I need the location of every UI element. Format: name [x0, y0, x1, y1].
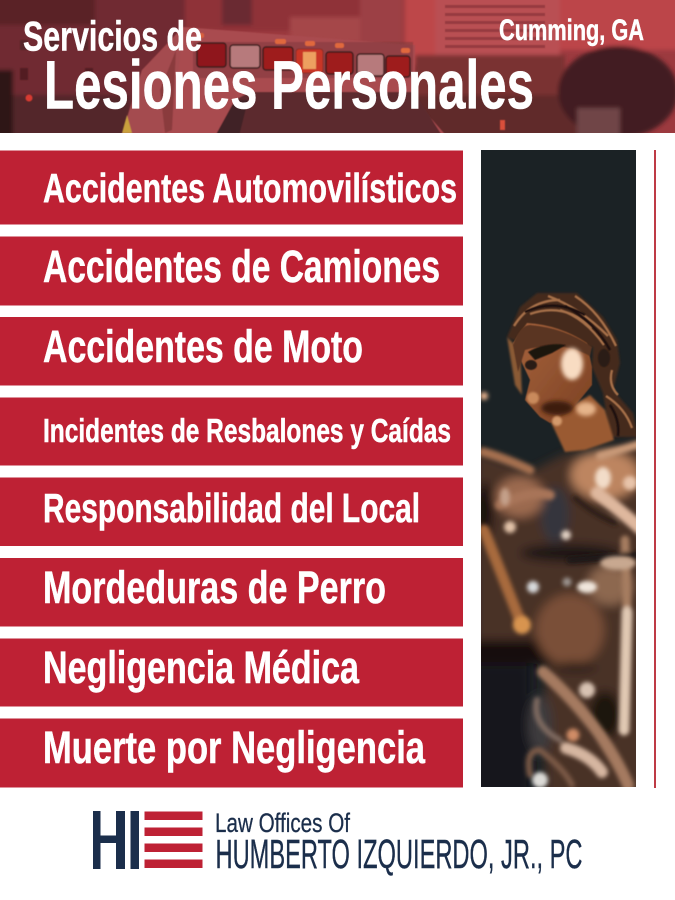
service row 1: Accidentes Automovilísticos — [43, 165, 457, 211]
service row 8: Muerte por Negligencia — [43, 722, 426, 773]
photo: Lady Justice statue — [481, 150, 636, 787]
service row 3 — [0, 317, 463, 386]
panel: header banner with ambulance photo — [0, 0, 675, 140]
service row 2: Accidentes de Camiones — [43, 241, 440, 292]
service row 3: Accidentes de Moto — [43, 321, 363, 372]
service row 5: Responsabilidad del Local — [43, 485, 420, 531]
service row 7: Negligencia Médica — [43, 642, 360, 693]
service row 6 — [0, 558, 463, 626]
service row 6: Mordeduras de Perro — [43, 562, 386, 613]
panel: services list — [0, 150, 463, 788]
service row 1 — [0, 150, 463, 224]
neck — [550, 395, 614, 452]
logo mark: HI with stripes — [93, 811, 202, 869]
hair — [507, 293, 638, 437]
heading: Servicios de: Servicios de — [23, 12, 202, 60]
service row 5 — [0, 478, 463, 546]
ambulance — [26, 27, 505, 140]
service row 8 — [0, 718, 463, 788]
service row 4: Incidentes de Resbalones y Caídas — [43, 412, 451, 449]
logo: Law Offices of Humberto Izquierdo — [93, 808, 582, 877]
service row 2 — [0, 236, 463, 306]
face — [513, 323, 592, 423]
body base tones — [481, 438, 636, 787]
building windows — [20, 5, 545, 80]
service row 4 — [0, 398, 463, 466]
logo text: Law Offices Of: Law Offices Of — [215, 808, 350, 838]
service row 7 — [0, 638, 463, 706]
decorative red vertical rule — [654, 150, 656, 788]
